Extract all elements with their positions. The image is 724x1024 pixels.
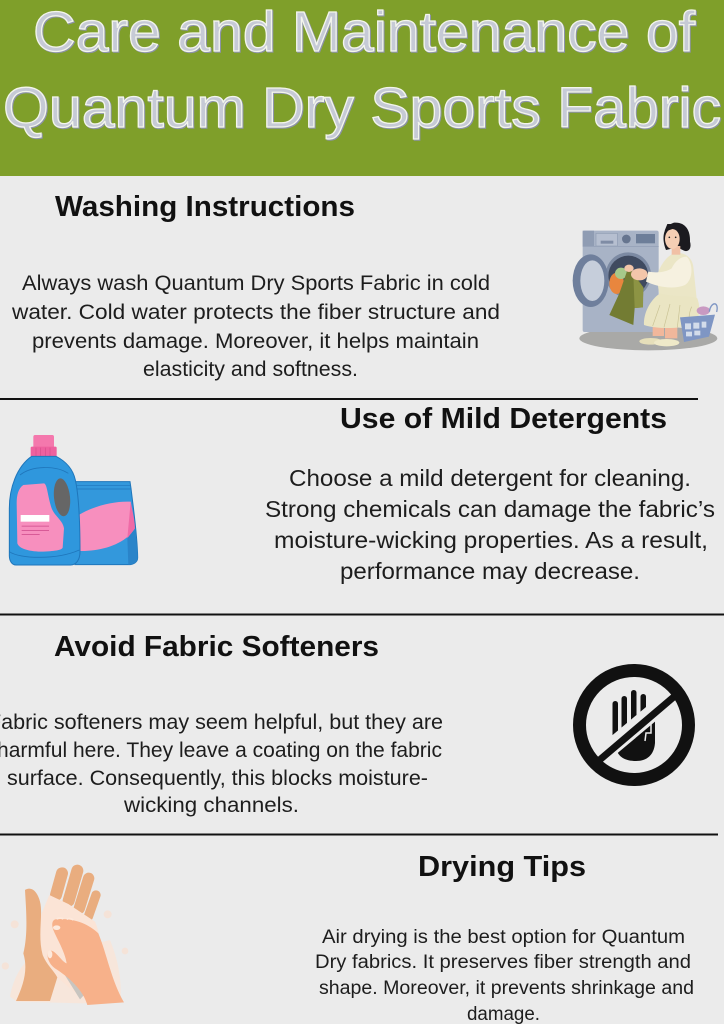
text: mild detergents body: performance may decrease.: [340, 558, 640, 584]
text: mild detergents body: moisture-wicking properties. As a result,: [274, 527, 708, 553]
heading: mild detergents: Use of Mild Detergents: [340, 403, 667, 435]
text: washing instructions body: [11, 272, 500, 381]
title: Care and Maintenance of: [34, 1, 696, 65]
panel: washing instructions: [11, 191, 717, 381]
panel: avoid fabric softeners: [0, 631, 688, 817]
heading: avoid fabric softeners: Avoid Fabric Softeners: [54, 631, 379, 663]
text: mild detergents body: [265, 465, 715, 584]
icon: detergent bottle and bag: [9, 435, 138, 565]
text: mild detergents body: Strong chemicals can damage the fabric’s: [265, 496, 715, 522]
text: avoid fabric softeners body: [0, 711, 443, 817]
text: avoid fabric softeners body: wicking channels.: [123, 794, 299, 817]
text: washing instructions body: water. Cold water protects the fiber structure and: [11, 301, 500, 324]
text: drying tips body: Air drying is the best option for Quantum: [322, 927, 685, 948]
text: washing instructions body: Always wash Quantum Dry Sports Fabric in cold: [22, 272, 490, 295]
title: Quantum Dry Sports Fabric: [3, 76, 721, 140]
text: avoid fabric softeners body: Fabric softeners may seem helpful, but they are: [0, 711, 443, 734]
panel: mild detergents: [9, 403, 715, 584]
hand: [612, 690, 655, 761]
text: avoid fabric softeners body: harmful here. They leave a coating on the fabric: [0, 739, 442, 762]
panel: drying tips: [2, 851, 694, 1024]
heading: drying tips: Drying Tips: [418, 851, 586, 883]
title: Quantum Dry Sports Fabric: [4, 77, 722, 141]
title: Care and Maintenance of: [33, 0, 695, 64]
icon: woman at washing machine: [573, 223, 717, 350]
heading: washing instructions: Washing Instructions: [55, 191, 355, 223]
text: drying tips body: [315, 927, 694, 1024]
text: drying tips body: Dry fabrics. It preserves fiber strength and: [315, 952, 691, 973]
icon: no-touch hand sign: [580, 670, 688, 780]
divider lines: [0, 398, 724, 836]
text: washing instructions body: elasticity and softness.: [143, 358, 358, 381]
icon: hands: [2, 871, 128, 1005]
text: drying tips body: shape. Moreover, it prevents shrinkage and: [319, 978, 694, 999]
title: [3, 0, 722, 141]
text: washing instructions body: prevents damage. Moreover, it helps maintain: [32, 330, 479, 353]
title banner: [0, 0, 724, 176]
text: mild detergents body: Choose a mild detergent for cleaning.: [289, 465, 691, 491]
text: avoid fabric softeners body: surface. Consequently, this blocks moisture-: [7, 767, 428, 790]
